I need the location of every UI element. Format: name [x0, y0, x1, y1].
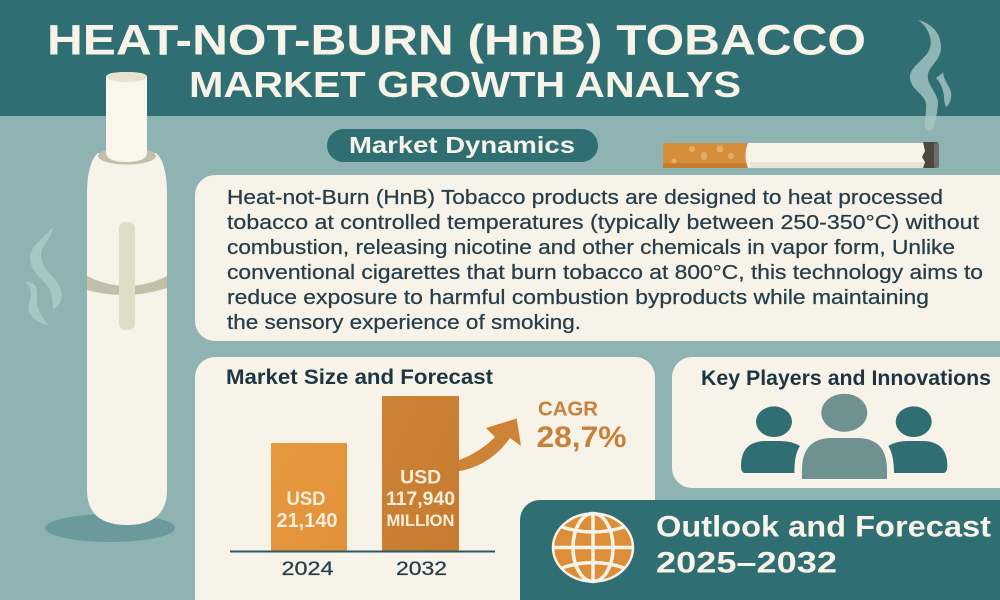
description text: combustion, releasing nicotine and other chemicals in vapor form, Unlike — [227, 237, 955, 259]
heading: key players: Key Players and Innovations — [701, 367, 991, 390]
header band — [0, 0, 1000, 116]
icon: HnB device — [45, 72, 175, 542]
description text: the sensory experience of smoking. — [227, 312, 581, 334]
panel: outlook — [520, 500, 1000, 600]
panel: key players — [672, 357, 1000, 488]
device body — [87, 153, 167, 525]
outlook text — [656, 511, 991, 580]
device band — [87, 276, 167, 295]
title: MARKET GROWTH ANALYS — [189, 64, 741, 105]
icon: globe — [553, 513, 633, 582]
icon: people — [741, 394, 947, 479]
growth arrow — [459, 418, 521, 471]
bar 2032: MILLION — [386, 512, 454, 530]
description text: Heat-not-Burn (HnB) Tobacco products are designed to heat processed — [227, 187, 943, 209]
title — [47, 16, 866, 105]
description text: conventional cigarettes that burn tobacco at 800°C, this technology aims to — [227, 262, 983, 284]
bar 2024: USD — [286, 489, 326, 510]
bar 2032: 117,940 — [386, 488, 455, 510]
axis labels: 2024 — [282, 559, 334, 580]
outlook text: 2025–2032 — [656, 547, 837, 580]
icon: cigarette — [663, 142, 939, 168]
description text: tobacco at controlled temperatures (typically between 250-350°C) without — [227, 212, 980, 234]
pill: market dynamics — [327, 129, 598, 162]
CAGR callout — [536, 399, 626, 454]
chart axis — [230, 550, 495, 552]
description text — [227, 187, 983, 334]
device slot — [119, 222, 135, 330]
icon: smoke right — [910, 20, 951, 131]
title: HEAT-NOT-BURN (HnB) TOBACCO — [47, 16, 866, 64]
device shadow — [45, 514, 175, 542]
bar 2032: USD — [400, 468, 441, 488]
pill: market dynamics: Market Dynamics — [349, 132, 575, 158]
bar 2032 — [382, 396, 459, 551]
description text: reduce exposure to harmful combustion byproducts while maintaining — [227, 287, 929, 309]
axis labels: 2032 — [396, 559, 447, 580]
CAGR callout: CAGR — [538, 399, 599, 421]
bar 2024 — [271, 443, 347, 551]
CAGR callout: 28,7% — [536, 421, 626, 454]
axis labels — [282, 559, 447, 580]
device mouthpiece — [106, 72, 147, 162]
device collar — [98, 148, 156, 164]
heading: market size: Market Size and Forecast — [226, 366, 493, 389]
panel: description — [195, 175, 1000, 341]
panel: market size and forecast — [195, 357, 655, 600]
icon: smoke left — [25, 227, 62, 325]
outlook text: Outlook and Forecast — [656, 511, 991, 544]
bar 2024: 21,140 — [276, 510, 338, 532]
